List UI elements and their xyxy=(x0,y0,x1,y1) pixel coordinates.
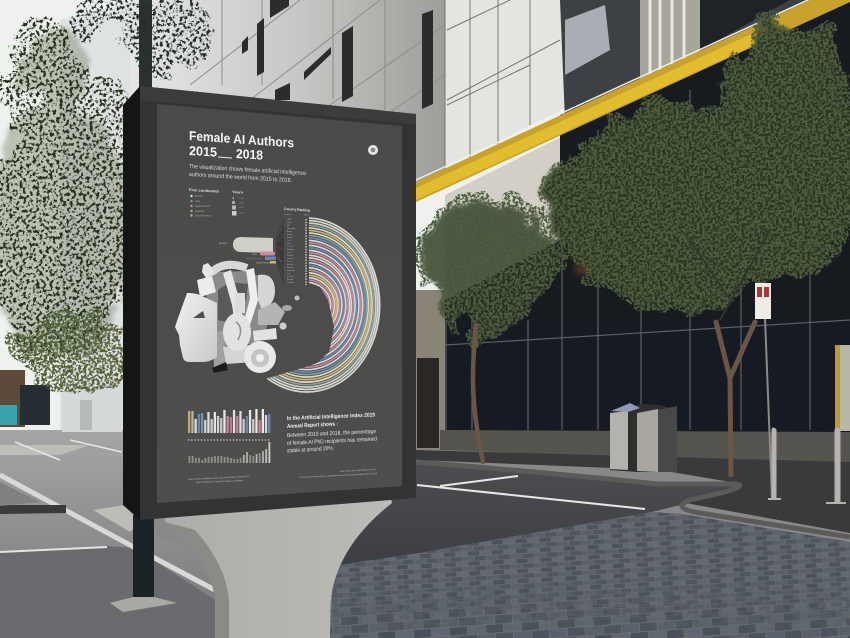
tree trunks xyxy=(473,230,770,475)
ear disc xyxy=(223,313,251,351)
country list: Denmark xyxy=(287,270,295,272)
poster panel xyxy=(157,104,402,503)
country ranking heading xyxy=(284,207,310,216)
corner pavement xyxy=(93,505,140,532)
bike hoops xyxy=(768,429,846,503)
median kerb xyxy=(0,505,66,514)
curb xyxy=(416,462,850,537)
legend: years: 2018 xyxy=(239,212,245,214)
title: Female AI Authors xyxy=(189,128,294,150)
legend: years xyxy=(232,190,245,216)
lower left asphalt xyxy=(0,546,215,638)
billboard front frame xyxy=(140,86,416,520)
distant shops xyxy=(0,370,122,432)
lower plate xyxy=(223,345,254,364)
country list: UK xyxy=(287,225,290,227)
radial arc chart xyxy=(266,217,381,393)
continent bars xyxy=(219,237,276,264)
eye xyxy=(193,311,205,318)
country list: Finland xyxy=(287,276,294,278)
country list: USA xyxy=(287,218,292,221)
dome plate xyxy=(258,275,275,310)
country list: Japan xyxy=(287,240,292,242)
dark interior shadow xyxy=(218,282,248,322)
country list: Ireland xyxy=(287,279,293,281)
footnote left: Source: Artificial Intelligence Index 2019 Annual Report, Stanford HAI xyxy=(188,475,249,481)
country ranking heading: Country Ranking xyxy=(284,207,310,213)
left road xyxy=(0,430,230,638)
description: authors around the world from 2015 to 2018. xyxy=(189,172,292,184)
glass upper reflection light xyxy=(445,0,565,168)
legend: years: 2017 xyxy=(239,207,245,209)
legend: years: Years xyxy=(232,190,243,195)
country list: Iran xyxy=(287,273,290,275)
robot head illustration xyxy=(175,263,300,373)
country list: Austria xyxy=(287,263,294,266)
head inner machinery xyxy=(203,271,272,352)
billboard xyxy=(123,86,416,520)
pole behind pillar xyxy=(110,515,177,612)
yellow panel far right xyxy=(835,345,850,431)
report text xyxy=(287,412,377,454)
right big tree xyxy=(545,20,850,310)
legend: years: 2015 xyxy=(239,198,245,200)
legend: continents: Five continents xyxy=(189,188,219,193)
country list: Korea xyxy=(287,261,293,263)
warm interior lights xyxy=(575,250,645,275)
sky xyxy=(0,0,850,440)
wheel xyxy=(244,341,276,373)
legend: continents: South America xyxy=(195,214,211,218)
middle tree xyxy=(420,188,556,332)
country list: Norway xyxy=(287,267,294,269)
country list: India xyxy=(287,252,292,254)
mullions lower xyxy=(445,40,850,430)
country list: France xyxy=(287,234,294,236)
country list: Poland xyxy=(287,255,293,257)
country list: Czechia xyxy=(287,282,295,284)
cobblestones xyxy=(330,512,850,638)
upper leaves near pole xyxy=(75,0,215,75)
right bracket xyxy=(243,268,258,325)
lower dark glass xyxy=(445,0,850,432)
legend: continents xyxy=(189,188,219,218)
right sidewalk xyxy=(416,450,850,533)
title xyxy=(189,128,294,163)
top bar chart xyxy=(188,409,270,433)
beige wall and door xyxy=(416,290,445,450)
small disc xyxy=(279,322,287,330)
country list: Brazil xyxy=(287,231,293,233)
top hose xyxy=(212,265,247,272)
left distant tree xyxy=(5,314,127,390)
country list: Greece xyxy=(287,258,294,260)
top gear xyxy=(202,263,214,278)
country list xyxy=(287,218,295,284)
footnote right: The data covers female authors of AI publications from five continents between 2015 and 2018 xyxy=(299,472,378,479)
left tree haze xyxy=(0,25,130,360)
neck mechanism xyxy=(213,330,226,367)
concrete pillar xyxy=(165,495,392,638)
fan blade xyxy=(282,305,292,311)
yellow beam xyxy=(416,0,850,202)
title dash xyxy=(218,157,232,158)
road markings right xyxy=(417,476,645,509)
rank number column xyxy=(305,219,307,285)
legend: continents: Asia xyxy=(195,200,200,203)
chart tick row xyxy=(188,439,271,441)
description: The visualization shows female artificial intelligence xyxy=(189,164,307,177)
building facade with panels xyxy=(130,0,445,200)
lower left bright reflection xyxy=(445,135,565,300)
floating disc xyxy=(294,296,300,300)
country list: Spain xyxy=(287,237,292,239)
main road right xyxy=(330,462,740,568)
footnote right: Data from AI Index Report 2019 xyxy=(340,468,377,473)
side box xyxy=(253,328,277,341)
country list: Canada xyxy=(287,246,295,248)
footnote left: Data visualization of female AI authors worldwide xyxy=(196,479,244,484)
country list: China xyxy=(287,222,293,224)
plinth xyxy=(440,430,850,465)
description xyxy=(189,164,307,184)
tree pole behind board xyxy=(139,0,152,88)
country ranking heading: Rank xyxy=(304,214,310,216)
legend: years: 2016 xyxy=(239,202,245,204)
report text: Between 2010 and 2018, the percentage xyxy=(287,429,376,439)
left road markings xyxy=(0,440,215,590)
logo badge xyxy=(368,145,378,155)
street sign and pole xyxy=(755,283,772,498)
side struts xyxy=(258,302,285,325)
footnote right xyxy=(299,468,378,479)
left bracket xyxy=(223,270,244,332)
center column xyxy=(235,293,245,313)
report text: of female AI PhD recipients has remained xyxy=(287,437,377,447)
glass mullions xyxy=(445,0,560,170)
report text: stable at around 20%. xyxy=(287,446,334,454)
legend: continents: North America xyxy=(195,205,211,208)
report text: In the Artificial Intelligence Index 2019 xyxy=(287,412,375,422)
left trees xyxy=(0,20,140,365)
title: 2015 xyxy=(189,143,217,160)
title: 2018 xyxy=(236,146,263,163)
footnote left xyxy=(188,475,249,484)
face mask xyxy=(175,293,217,362)
report text: Annual Report shows : xyxy=(287,421,338,430)
bottom bar chart xyxy=(188,442,270,463)
continent bars: Asia xyxy=(252,253,257,256)
country list: Sweden xyxy=(287,249,294,251)
continent bars: North America xyxy=(246,258,262,260)
country list: Germany xyxy=(287,228,295,230)
country list: Italy xyxy=(287,242,291,245)
glass upper reflection dark building xyxy=(560,0,810,120)
distant white building xyxy=(60,0,135,430)
facade windows xyxy=(242,0,433,109)
billboard side xyxy=(123,86,140,520)
bins xyxy=(610,403,677,472)
legend: continents: Australia xyxy=(195,210,205,213)
ear detail xyxy=(236,322,241,340)
legend: continents: Europe xyxy=(195,195,203,198)
skull block xyxy=(197,276,216,297)
continent bars: Europe xyxy=(219,242,227,245)
connector fan xyxy=(274,218,284,285)
continent bars: South America xyxy=(256,262,272,264)
country ranking heading: Country xyxy=(284,213,293,216)
black base xyxy=(212,362,228,373)
